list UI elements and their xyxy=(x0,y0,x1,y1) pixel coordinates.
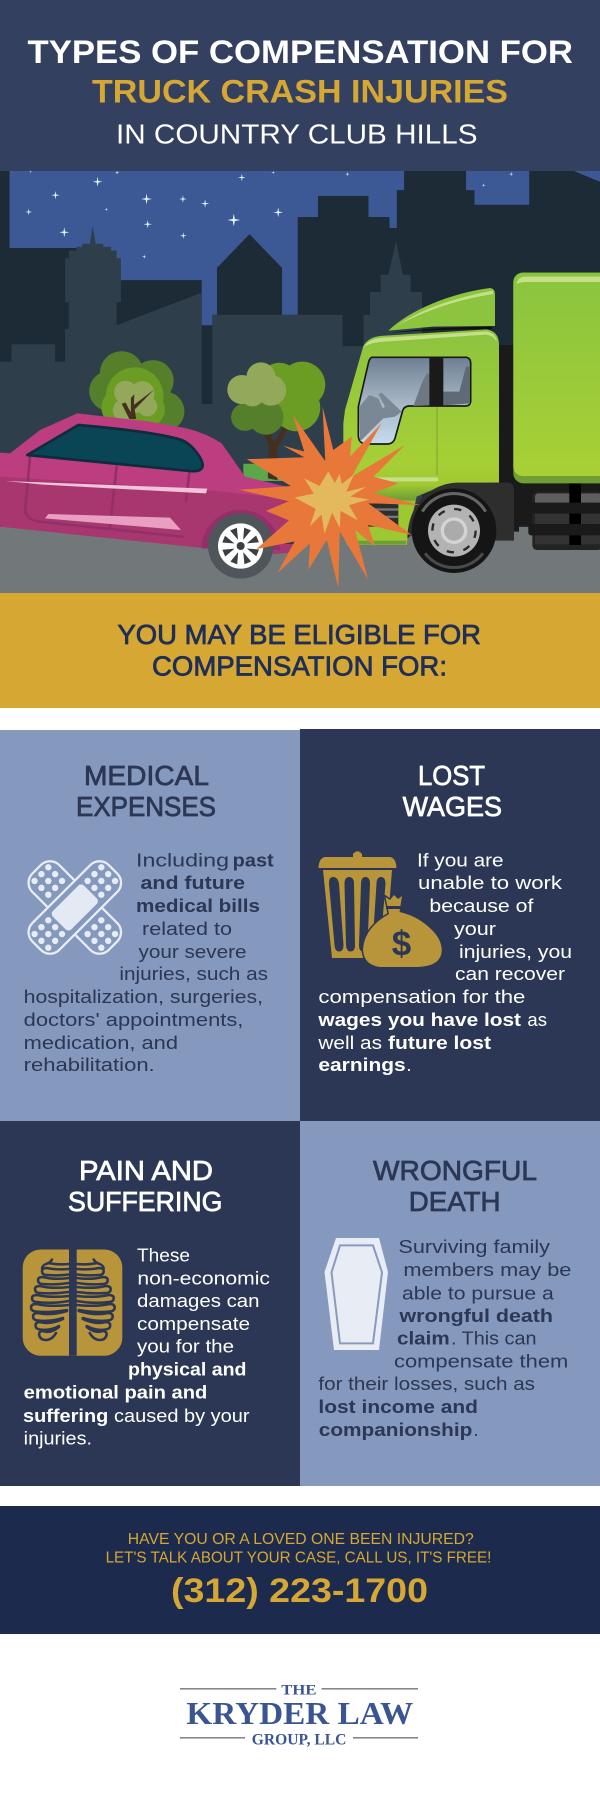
heading: lost wages: WAGES xyxy=(403,791,502,822)
body text: wrongful death: . xyxy=(473,1419,479,1440)
truck cab xyxy=(343,329,499,545)
icon: crossed bandages xyxy=(23,856,126,959)
body text: wrongful death: . This can xyxy=(451,1328,536,1348)
body text: wrongful death: wrongful death xyxy=(398,1305,553,1326)
cta phone number: (312) 223-1700 xyxy=(171,1572,428,1610)
explosion xyxy=(239,407,420,588)
heading: medical expenses: EXPENSES xyxy=(76,791,216,822)
title line 1: TYPES OF COMPENSATION FOR xyxy=(28,34,573,70)
body text: wrongful death xyxy=(318,1236,571,1440)
body text: medical expenses: rehabilitation. xyxy=(24,1054,155,1075)
skyline: front buildings xyxy=(0,226,422,536)
body text: medical expenses: medication, and xyxy=(24,1032,178,1053)
car window xyxy=(27,425,203,471)
logo: the kryder law group xyxy=(180,1682,418,1748)
body text: pain and suffering: suffering xyxy=(23,1405,108,1426)
heading: lost wages: LOST xyxy=(418,760,485,791)
body text: lost wages: injuries, you xyxy=(459,941,572,962)
panel: pain and suffering xyxy=(0,1121,300,1486)
call to action band xyxy=(0,1506,600,1634)
body text: lost wages: because of xyxy=(429,895,534,916)
body text: wrongful death: lost income and xyxy=(318,1396,478,1417)
title line 3: IN COUNTRY CLUB HILLS xyxy=(116,118,478,150)
body text: lost wages: well as xyxy=(317,1032,382,1053)
body text: wrongful death: able to pursue a xyxy=(402,1282,555,1304)
body text: medical expenses: your severe xyxy=(138,941,246,962)
car xyxy=(0,413,302,579)
body text: medical expenses: past xyxy=(233,850,274,870)
logo: the kryder law group: THE xyxy=(281,1682,316,1698)
truck roof fairing xyxy=(388,288,495,333)
body text: lost wages: wages you have lost xyxy=(317,1009,521,1030)
banner heading line 1: YOU MAY BE ELIGIBLE FOR xyxy=(118,619,481,650)
panel: header xyxy=(0,0,600,171)
skyline: back buildings xyxy=(0,171,600,536)
icon: rib cage xyxy=(23,1250,122,1356)
heading: wrongful death: DEATH xyxy=(409,1186,501,1217)
truck fender xyxy=(407,483,514,541)
body text: medical expenses: hospitalization, surgeries, xyxy=(24,986,263,1007)
heading: medical expenses: MEDICAL xyxy=(84,760,209,791)
body text: pain and suffering: non-economic xyxy=(137,1268,270,1288)
panel: medical expenses xyxy=(0,730,300,1121)
body text: pain and suffering: These xyxy=(137,1244,190,1266)
heading: medical expenses xyxy=(76,760,216,822)
illustration: truck crash scene xyxy=(0,170,600,593)
grass patch xyxy=(243,464,293,481)
truck xyxy=(343,273,600,573)
body text: medical expenses: injuries, such as xyxy=(119,963,268,984)
car wheel xyxy=(201,510,280,579)
body text: wrongful death: Surviving family xyxy=(398,1236,551,1257)
body text: pain and suffering: you for the xyxy=(137,1336,234,1356)
heading: pain and suffering xyxy=(68,1155,222,1217)
heading: pain and suffering: PAIN AND xyxy=(79,1155,213,1186)
body text: pain and suffering: emotional pain and xyxy=(24,1382,207,1402)
body text: pain and suffering: damages can xyxy=(137,1290,260,1311)
banner heading line 2: COMPENSATION FOR: xyxy=(152,650,447,682)
tree right of car xyxy=(227,362,325,480)
body text: pain and suffering: injuries. xyxy=(24,1428,92,1448)
body text: pain and suffering xyxy=(23,1244,270,1448)
body text: lost wages: compensation for the xyxy=(318,986,525,1007)
body text: pain and suffering: compensate xyxy=(137,1313,250,1334)
heading: wrongful death: WRONGFUL xyxy=(373,1155,537,1186)
body text: medical expenses: medical bills xyxy=(136,895,260,916)
truck wheel xyxy=(412,488,496,573)
road xyxy=(0,527,600,593)
body text: pain and suffering: caused by your xyxy=(114,1405,250,1426)
heading: lost wages xyxy=(403,760,502,822)
truck chassis xyxy=(499,345,600,550)
tree behind car xyxy=(89,351,184,434)
body text: wrongful death: for their losses, such as xyxy=(318,1373,535,1394)
heading: pain and suffering: SUFFERING xyxy=(68,1186,222,1217)
body text: lost wages: If you are xyxy=(417,850,504,870)
body text: lost wages: earnings xyxy=(318,1054,406,1075)
body text: lost wages: can recover xyxy=(455,963,565,984)
banner: eligibility xyxy=(0,593,600,708)
body text: lost wages: as xyxy=(527,1009,547,1030)
body text: wrongful death: companionship xyxy=(319,1419,472,1440)
body text: wrongful death: claim xyxy=(397,1328,450,1348)
icon: trash can and money bag: $ xyxy=(392,924,411,964)
body text: lost wages xyxy=(317,850,572,1075)
body text: lost wages: future lost xyxy=(388,1032,491,1053)
body text: medical expenses: and future xyxy=(140,872,245,893)
body text: lost wages: . xyxy=(406,1054,412,1075)
car highlights xyxy=(5,481,207,530)
car body xyxy=(0,413,302,554)
sky with stars xyxy=(0,170,600,593)
icon: trash can and money bag xyxy=(318,851,442,967)
logo: the kryder law group: GROUP, LLC xyxy=(252,1732,346,1748)
body text: medical expenses: doctors' appointments, xyxy=(24,1009,243,1030)
body text: medical expenses: related to xyxy=(142,918,232,939)
truck cargo box xyxy=(513,273,600,483)
body text: medical expenses xyxy=(24,850,274,1075)
panel: wrongful death xyxy=(300,1121,600,1486)
cta invitation: LET'S TALK ABOUT YOUR CASE, CALL US, IT'S FREE! xyxy=(106,1550,491,1566)
body text: pain and suffering: physical and xyxy=(128,1358,246,1380)
truck window xyxy=(358,357,471,444)
panel: lost wages xyxy=(300,729,600,1121)
body text: medical expenses: Including xyxy=(136,850,229,870)
body text: lost wages: your xyxy=(454,918,496,939)
title line 2: TRUCK CRASH INJURIES xyxy=(92,74,508,110)
body text: wrongful death: compensate them xyxy=(394,1350,568,1372)
car door lines xyxy=(25,457,189,537)
body text: wrongful death: members may be xyxy=(403,1259,571,1280)
body text: lost wages: unable to work xyxy=(418,872,563,893)
icon: coffin xyxy=(324,1238,388,1350)
logo: the kryder law group: KRYDER LAW xyxy=(186,1695,413,1731)
cta question: HAVE YOU OR A LOVED ONE BEEN INJURED? xyxy=(128,1531,474,1548)
heading: wrongful death xyxy=(373,1155,537,1217)
